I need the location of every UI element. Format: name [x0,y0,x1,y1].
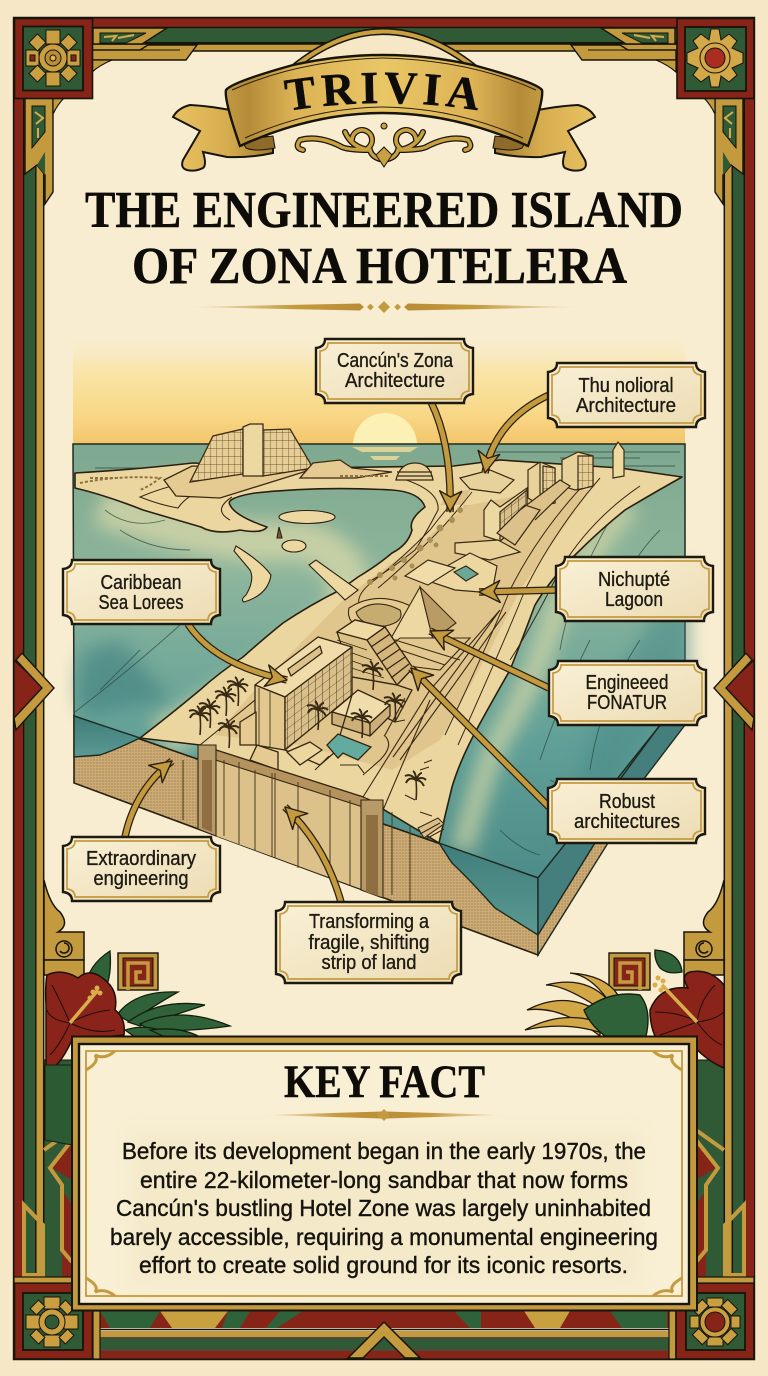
arrow: Robust architectures [411,668,549,807]
key fact body text: Cancún's bustling Hotel Zone was largely uninhabited [116,1195,651,1221]
label: Cancún's Zona Architecture: Architecture [345,370,445,392]
arrow: notional architecture [485,395,549,473]
label: Transforming a fragile, shifting strip of land: fragile, shifting [308,932,430,954]
key fact body text: entire 22-kilometer-long sandbar that now forms [140,1167,628,1193]
lower-right decorative panel with floral [525,880,754,1283]
label: Engineeed FONATUR: FONATUR [587,692,667,714]
arrow: Transforming strip of land [285,807,341,902]
corner emblem: top-right sun gear [677,18,754,98]
label: Cancún's Zona Architecture [316,339,473,403]
key fact body text: effort to create solid ground for its iconic resorts. [139,1252,628,1278]
key fact heading: KEY FACT [284,1056,485,1108]
bottom band foliage [100,1311,667,1328]
sky [73,335,685,540]
banner ribbon [226,55,542,146]
label: Thu nolioral Architecture [548,363,705,427]
lagoon islands [234,510,358,602]
frame: right band [724,98,754,1288]
label: Caribbean Sea Lorees: Caribbean [100,572,182,594]
label: Robust architectures: Robust [599,791,655,813]
small pyramid and compound [348,587,470,670]
label: Nichupté Lagoon: Lagoon [605,589,663,611]
right top leaf [655,950,682,973]
right greek key [609,953,650,990]
title: THE ENGINEERED ISLAND [85,182,683,239]
mid-distance resort towers [405,442,624,593]
trivia banner [172,28,596,172]
left greek key [118,953,158,990]
left gold scroll column [44,880,84,990]
label: Robust architectures: architectures [574,811,680,833]
key fact body text [110,1138,658,1278]
banner arch [293,32,475,68]
title [85,182,683,295]
scene: engineered island cutaway [73,335,690,955]
label: Nichupté Lagoon [556,557,713,621]
arrow: Cancún's Zona label to hotel zone [431,402,450,512]
foliage along promenade [367,507,463,585]
land: sandbar and far shore [75,460,682,843]
label: Engineeed FONATUR [549,661,706,725]
arrow: Caribbean Sea [188,624,287,680]
arrow: Engineered FONATUR [430,631,549,688]
banner text baseline [282,103,488,112]
left side lower column [14,1060,72,1283]
key fact body text: Before its development began in the early 1970s, the [122,1138,646,1164]
label: Transforming a fragile, shifting strip of land: Transforming a [309,911,430,933]
panel: key fact [72,1036,697,1310]
arrow: Nichupté Lagoon [479,590,556,592]
right side lower column [696,1060,754,1283]
key fact body text: barely accessible, requiring a monumental engineering [110,1224,658,1250]
label: Thu nolioral Architecture: Architecture [576,395,676,417]
label: Cancún's Zona Architecture: Cancún's Zona [337,350,454,372]
frame: top-right bracket [571,28,743,204]
label: Extraordinary engineering: Extraordinary [86,848,196,870]
frame: right chevron [714,653,754,730]
frame: left chevron [14,653,54,730]
right hibiscus [650,971,724,1068]
frame: left band [14,98,44,1288]
right monstera leaf [584,994,648,1036]
corner emblem: bottom-right ring [669,1283,754,1359]
far hotel and shore buildings [80,424,433,498]
label: Robust architectures [548,779,705,843]
resort grounds [200,610,506,840]
sun [353,413,417,445]
label: Caribbean Sea Lorees [63,560,220,624]
left green leaf [85,951,110,990]
key fact divider [265,1109,503,1121]
arrow: Extraordinary engineering [125,761,172,837]
frame: top-left bracket [25,28,197,204]
key fact inner border [86,1051,682,1296]
cutaway front wall [74,716,538,955]
label: Transforming a fragile, shifting strip of land [276,902,461,983]
banner flourish [298,123,470,167]
label: Extraordinary engineering [63,837,220,901]
stepped pyramid hotel [337,620,413,685]
palms [189,661,426,800]
corner emblem: top-left Aztec cross [14,18,92,98]
corner emblem: bottom-left ring [14,1283,100,1359]
left palm frond [117,992,230,1037]
frame: bottom chevron [348,1322,420,1358]
label: Caribbean Sea Lorees: Sea Lorees [98,592,184,614]
right gold palm [525,973,618,1036]
left hibiscus [46,972,124,1070]
frame: bottom band [93,1304,676,1358]
banner right tail [493,105,595,171]
title: OF ZONA HOTELERA [132,238,627,295]
title divider [188,301,580,313]
right gold scroll column [684,880,724,990]
lower-left decorative panel with floral [14,880,230,1283]
front tower hotel [240,637,412,770]
label: Engineeed FONATUR: Engineeed [586,672,668,694]
hotel swimming pool [327,734,371,760]
left dark leaves [45,1065,72,1145]
exposed sea wall faces [74,694,685,955]
banner left tail [173,105,275,171]
label: Nichupté Lagoon: Nichupté [598,569,670,591]
label: Extraordinary engineering: engineering [94,868,188,890]
label: Thu nolioral Architecture: Thu nolioral [578,375,674,397]
frame: top band [92,18,677,51]
water surface [73,444,690,878]
label: Transforming a fragile, shifting strip of land: strip of land [322,952,416,974]
banner text: TRIVIA [284,72,478,110]
